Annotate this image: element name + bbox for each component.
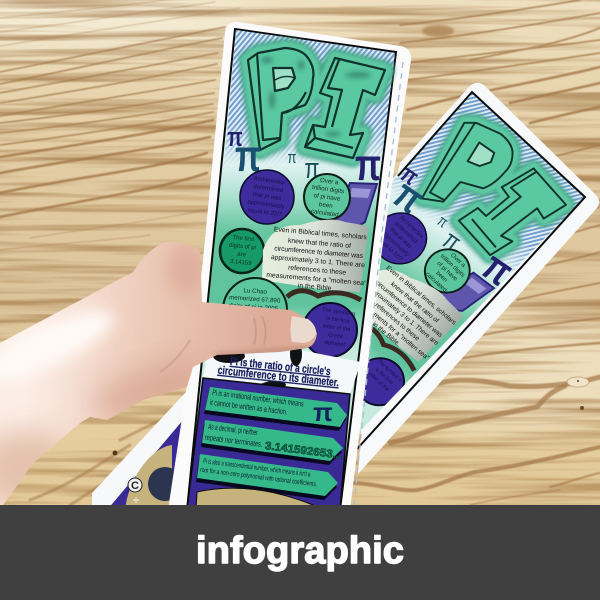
arrow: irrational number: π [313,397,333,427]
text: biblical times: in the Bible. [298,283,334,293]
purple circle: Archimedes: Archimedes [253,176,285,186]
purple band [187,378,350,510]
back card PI letters [421,122,567,256]
green circle: trillion digits: Over a [319,177,339,186]
back card purple circle: approximately [380,230,410,258]
marble text block [262,220,369,292]
back card pi symbols [393,168,512,286]
scribble below text [287,291,361,300]
arrow: irrational number [204,387,347,431]
back card printed artwork [360,94,584,432]
tan dome at bottom [196,488,315,510]
hand holding bookmarks [0,242,317,510]
back card black border [357,92,585,449]
back card text: Even in Biblical times, scholars [384,265,458,327]
shadow halo behind PI [248,48,385,158]
purple circle: thumb overlapped: alphabet [323,340,346,349]
purple circle: thumb overlapped: Greek [328,332,344,340]
arrow: decimal repeats [201,420,343,465]
purple circle: Archimedes: that pi was [252,192,282,202]
dark green circle: first digits: digits of pi [229,243,256,251]
back card green circle: Over a [449,252,467,269]
footer label: infographic [196,530,404,572]
calculator keys C and divide: ÷ [133,495,139,507]
hand shading [0,246,310,510]
back card purple circle: determined [393,221,418,245]
dark calculator dial [148,467,182,501]
back card green circle: calculated [424,271,448,294]
blurred smudges inside letters [261,57,371,136]
arrow: decimal repeats: repeats nor terminates. [204,433,263,449]
back card white paper [358,83,599,474]
footer bar [0,505,600,600]
pi symbols: π [288,148,296,167]
back card green circle: trillion digits [439,254,465,279]
title letters PI [248,48,385,158]
front bookmark card [168,22,411,510]
back card lower purple circle [364,357,405,406]
front card panel background [187,29,396,510]
back card text: knew that the ratio of [389,281,440,325]
dark green circle: first digits: 3.14159 [230,259,252,267]
green circle: Lu Chao [223,278,287,342]
back card PI halo [408,114,579,272]
purple circle: Archimedes: determined [253,184,283,194]
back card pi symbols: π [384,171,433,223]
green circle: Lu Chao: Lu Chao [243,287,268,296]
text: biblical times: approximately 3 to 1. There are [271,254,365,269]
pi symbols: π [227,122,243,152]
back card pi symbols: π [433,213,451,232]
green circle: Lu Chao: memorized 67,890 [229,294,281,305]
back card purple circle [381,212,428,264]
back card green circle: of pi have [435,261,459,283]
back card lower purple circle: is the first [373,367,394,386]
wood knots [112,25,589,456]
white heading band [203,350,361,394]
arrow: irrational number: Pi is an irrational number, which means [212,388,304,409]
back card pi symbols: π [473,243,522,295]
green circle: trillion digits: of pi have [313,192,341,203]
purple circle: Archimedes [240,170,294,224]
back card text: circumference to diameter was [374,280,444,339]
heading: ratio definition [217,356,340,389]
back card green circle [424,248,471,294]
calculator keys C and divide [128,478,142,507]
back card text: references to these [374,302,421,343]
icon: calculator [332,183,377,227]
green circle: Lu Chao: digits of pi in 2005. [228,302,280,313]
black blobs around heading [213,342,302,392]
back card text: approximately 3 to 1. There are [366,284,440,347]
pi symbols: π [355,141,381,190]
green circle: trillion digits: calculated [310,208,340,219]
back card text [373,265,456,359]
text: biblical times [265,226,371,295]
back card green circle: been [434,270,448,284]
back card lower purple circle: The symbol π [375,358,403,384]
heading: ratio definition: circumference to its diameter. [217,365,340,389]
back card lower purple circle: letter of the [367,371,390,393]
back card scribble [372,326,416,372]
arrow: transcendental number [196,454,338,500]
pi symbols [227,122,381,190]
arrow: irrational number: it cannot be written as a fraction. [210,398,288,417]
green circle: trillion digits: trillion digits [312,184,345,195]
dark green circle: first digits: The first [232,235,255,243]
back card purple circle: that pi was [388,227,412,250]
purple circle: Archimedes: approximately [247,199,285,210]
thumb nail [290,316,316,343]
dark green circle: first digits: are [237,252,247,258]
front card white paper [168,22,411,510]
tan dome [125,445,172,510]
text: biblical times: knew that the ratio of [288,238,351,250]
back card marble text block [373,270,464,362]
arrow: transcendental number: root for a non-zero polynomial with rational coefficients. [200,467,318,488]
purple circle: thumb overlapped [303,303,357,357]
back card pi symbols: π [436,225,467,258]
heading: ratio definition: Pi is the ratio of a circle's [229,356,331,378]
purple circle: thumb overlapped: The symbol π [322,307,356,318]
text: biblical times: references to these [288,265,347,277]
text: biblical times: Even in Biblical times, scholars [274,226,368,241]
green circle: trillion digits [304,174,350,220]
third bookmark, lower left [92,392,190,510]
green circle: trillion digits: been [319,201,334,210]
perforated edge [354,62,403,505]
arrow: decimal repeats: As a decimal, pi neither [208,422,259,437]
text: biblical times: circumference to diameter was [274,245,364,260]
back card purple circle: Archimedes [398,215,424,240]
pi symbols: π [235,132,261,181]
back card pi symbols: π [395,160,424,190]
purple circle: thumb overlapped: is the first [326,316,350,325]
back card text: measurements for a "molten sea" [352,295,431,362]
arrow: decimal repeats: 3.141592653... [264,440,343,462]
purple circle: thumb overlapped: letter of the [323,323,351,333]
purple circle: Archimedes: equal to 22/7 [247,207,283,218]
back card calculator [440,272,496,312]
back card purple circle: equal to 22/7 [375,236,404,263]
blue hatch background [224,30,395,165]
text: biblical times: measurements for a "molten sea" [266,272,367,288]
dark green circle: first digits [220,229,264,273]
back card text: in the Bible. [371,321,402,348]
back bookmark card [160,66,599,545]
green halo behind PI [248,48,385,158]
pi symbols: π [304,153,320,185]
arrow: transcendental number: Pi is also a transcendental number, which means it isn't a [203,458,311,479]
calculator keys C and divide: C [131,480,139,492]
